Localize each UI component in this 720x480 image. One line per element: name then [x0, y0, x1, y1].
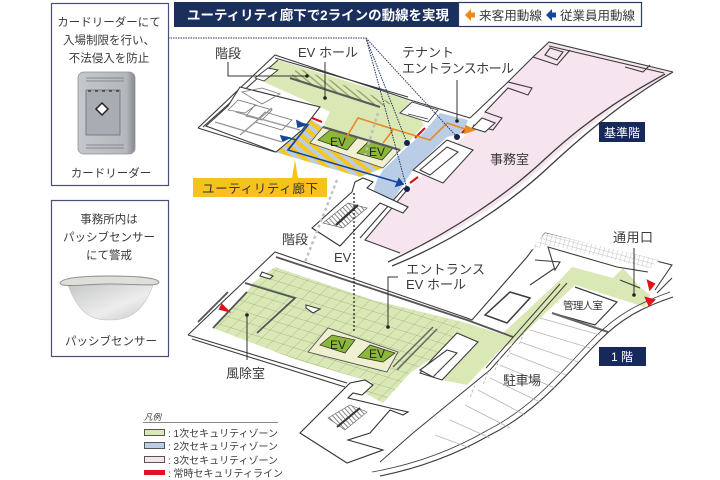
EV block lower — [308, 328, 398, 372]
orange visitor route — [346, 118, 474, 143]
floor tag: first floor: 1 階 — [611, 350, 633, 364]
walls — [198, 42, 673, 266]
labels: plan text: エントランス — [406, 262, 485, 277]
legend: 凡例 — [144, 412, 163, 422]
red security markers — [220, 281, 654, 311]
zone: office tertiary pink — [365, 42, 673, 254]
labels: plan text: 通用口 — [613, 230, 653, 245]
top right perforated area — [530, 233, 660, 268]
utility corridor hatch — [275, 118, 383, 177]
zone: entrance green grid — [213, 267, 467, 403]
labels: plan text: 事務室 — [490, 152, 529, 167]
title banner — [174, 2, 458, 27]
panel text: card reader description: 入場制限を行い、 — [63, 34, 155, 47]
callout: utility corridor — [193, 160, 327, 197]
panel: card reader — [52, 4, 168, 186]
stairs hatch — [290, 68, 393, 107]
EV shafts: EV — [330, 135, 346, 149]
zone: corridor green — [442, 267, 650, 385]
legend: : 常時セキュリティライン — [168, 467, 283, 480]
labels: plan text: 風除室 — [226, 366, 265, 381]
zone: secondary blue — [372, 113, 468, 200]
labels: plan text — [215, 45, 653, 388]
EV shafts lower — [320, 335, 395, 362]
plan: standard floor — [168, 38, 673, 266]
panel caption: sensor: パッシブセンサー — [65, 334, 157, 348]
route legend: 従業員用動線 — [560, 8, 635, 23]
panel text: sensor description: 事務所内は — [80, 212, 138, 226]
panel text: card reader description: カードリーダーにて — [57, 15, 161, 29]
EV shafts lower: EV — [330, 338, 346, 352]
grey route dots — [305, 113, 378, 262]
EV shafts: EV — [369, 145, 385, 159]
EV shafts — [318, 130, 393, 160]
labels: plan text: 管理人室 — [563, 299, 603, 312]
dotted callout lines — [168, 38, 457, 189]
leader: tenant hall — [456, 80, 458, 121]
labels: plan text: 階段 — [215, 46, 241, 61]
blue staff route — [281, 121, 403, 186]
leader: windbreak room — [246, 315, 248, 360]
legend: : 3次セキュリティゾーン — [168, 454, 278, 467]
zone: primary green — [255, 60, 424, 152]
floor tag: standard floor: 基準階 — [604, 125, 640, 140]
route legend: 来客用動線 — [479, 8, 542, 23]
leader: upper stairs — [228, 62, 307, 76]
card reader markers — [404, 134, 460, 192]
labels: plan text: EV ホール — [406, 277, 466, 292]
lower stairwell — [300, 380, 408, 463]
panel caption: card reader: カードリーダー — [71, 166, 151, 180]
legend — [143, 412, 283, 480]
red security lines — [312, 118, 467, 183]
icon: dome sensor — [60, 276, 159, 320]
leader end dots — [245, 74, 636, 329]
floor tag: standard floor — [599, 122, 645, 142]
labels: plan text: 階段 — [282, 232, 308, 247]
legend: : 2次セキュリティゾーン — [168, 440, 278, 453]
floor tag: first floor — [599, 347, 646, 366]
legend: : 1次セキュリティゾーン — [168, 427, 278, 440]
stairwell — [312, 178, 408, 246]
EV shafts lower: EV — [369, 347, 385, 361]
labels: plan text: EV — [334, 250, 352, 265]
leader: service entrance — [633, 248, 635, 295]
panel text: sensor description: パッシブセンサー — [63, 230, 155, 244]
labels: plan text: EV ホール — [298, 45, 358, 60]
dotted EV connector — [353, 193, 355, 333]
panel text: sensor description: にて警戒 — [86, 248, 132, 262]
leader: EV hall — [324, 62, 326, 98]
plan: first floor — [188, 193, 673, 476]
labels: plan text: 駐車場 — [503, 373, 541, 388]
leader: entrance EV hall — [388, 277, 398, 327]
panel text: card reader description: 不法侵入を防止 — [69, 51, 149, 65]
title banner: ユーティリティ廊下で2ラインの動線を実現 — [187, 7, 449, 23]
route legend — [458, 2, 642, 26]
parking bays — [435, 318, 600, 448]
labels: plan text: テナント — [402, 45, 454, 60]
walls lower — [188, 233, 673, 476]
callout: utility corridor: ユーティリティ廊下 — [202, 182, 318, 196]
icon: card reader device — [78, 72, 135, 154]
panel: passive sensor — [52, 200, 168, 356]
labels: plan text: エントランスホール — [402, 61, 514, 76]
EV block — [310, 127, 400, 168]
